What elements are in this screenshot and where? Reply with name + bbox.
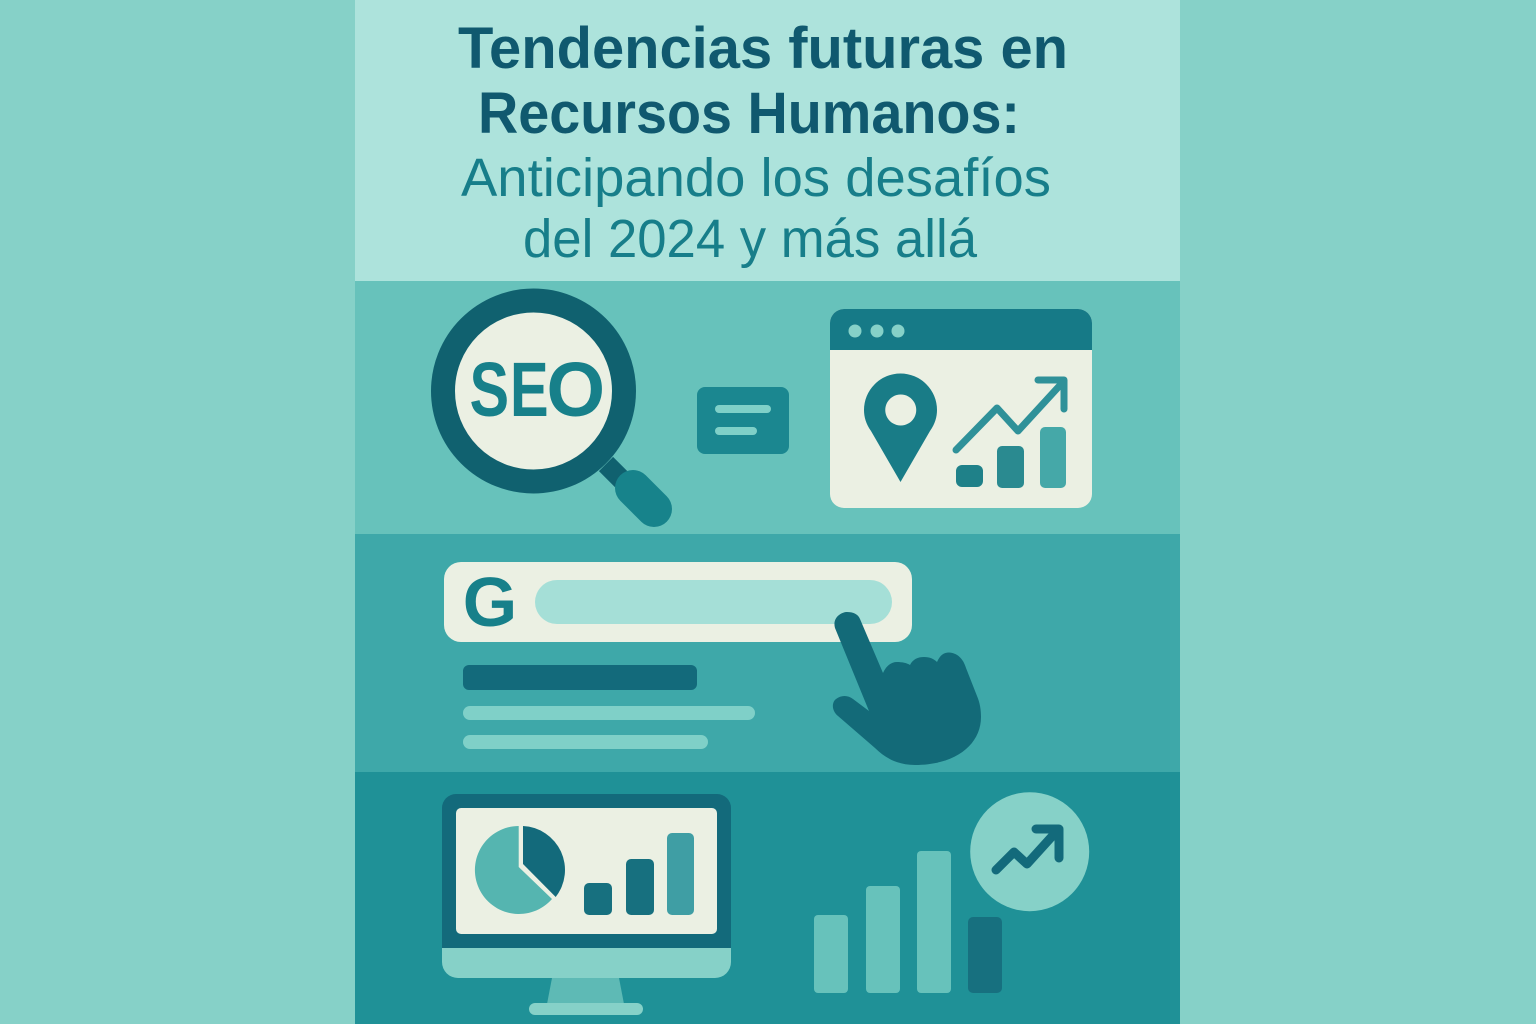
panel: analytics <box>355 772 1180 1024</box>
heading: main title: Tendencias futuras en <box>458 16 1068 81</box>
result lines <box>463 665 755 749</box>
chart: monitor bars <box>584 833 694 915</box>
panel: title <box>355 0 1180 281</box>
icon: magnifying glass SEO <box>443 300 654 509</box>
chart: pie <box>475 826 565 914</box>
heading: subtitle: del 2024 y más allá <box>523 209 978 269</box>
icon: monitor <box>442 794 731 1015</box>
chart: large bars <box>814 851 1002 993</box>
icon: magnifying glass SEO: E <box>510 347 549 433</box>
chart: rising bars <box>956 427 1066 488</box>
arrow: growth <box>956 380 1064 450</box>
heading: subtitle: Anticipando los desafíos <box>461 148 1051 208</box>
icon: pointing hand <box>833 612 981 765</box>
search bar <box>444 562 912 642</box>
icon: magnifying glass SEO: S <box>470 347 509 433</box>
heading: subtitle <box>461 148 1051 269</box>
heading: main title <box>458 16 1068 146</box>
heading: main title: Recursos Humanos: <box>478 81 1020 146</box>
icon: message box <box>697 387 789 454</box>
panel: search <box>355 534 1180 772</box>
icon: trend circle <box>970 792 1089 911</box>
icon: G logo: G <box>463 563 517 641</box>
panel: SEO <box>355 281 1180 534</box>
icon: magnifying glass SEO: O <box>546 347 605 433</box>
icon: map pin <box>864 374 937 482</box>
icon: browser window <box>830 309 1092 508</box>
